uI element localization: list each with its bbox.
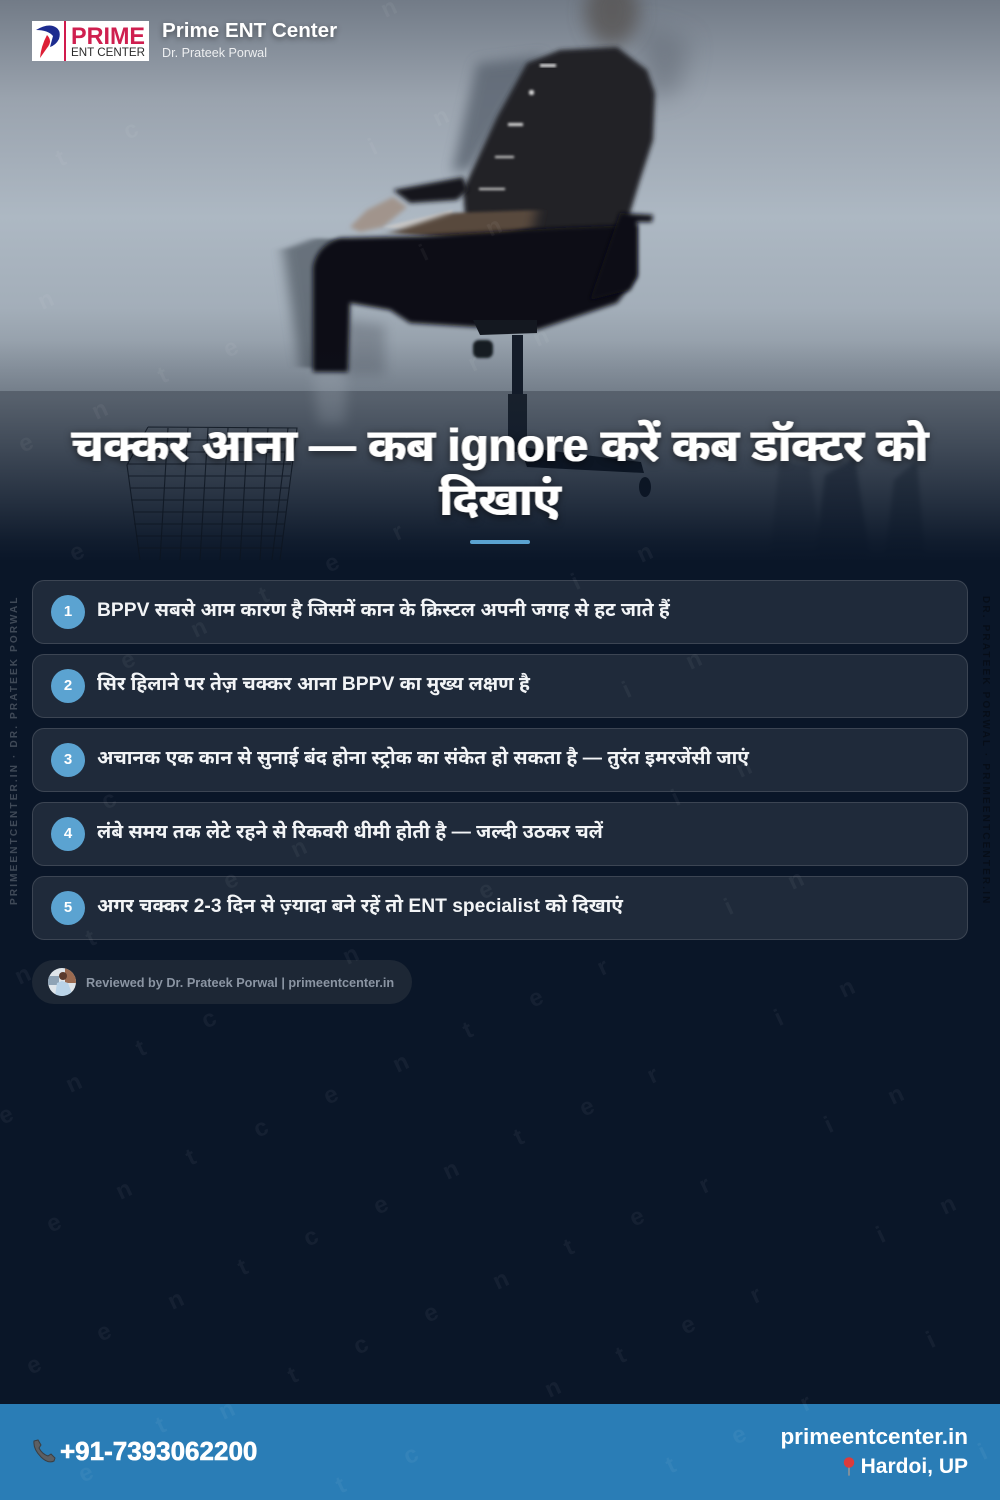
watermark letters overlay: n bbox=[540, 1373, 565, 1404]
tip 5 bbox=[32, 876, 968, 940]
watermark letters overlay: n bbox=[681, 645, 706, 676]
watermark letters overlay: t bbox=[181, 1143, 200, 1171]
brand name: Prime ENT Center bbox=[162, 19, 337, 42]
reviewer avatar bbox=[48, 968, 76, 996]
watermark letters overlay: t bbox=[254, 581, 273, 609]
watermark letters overlay: n bbox=[10, 960, 35, 991]
watermark letters overlay: n bbox=[783, 865, 808, 896]
watermark letters overlay: e bbox=[42, 1208, 66, 1238]
watermark letters overlay: n bbox=[528, 322, 553, 353]
tip 4 bbox=[32, 802, 968, 866]
list of five tips bbox=[32, 580, 968, 940]
tip 1 bbox=[32, 580, 968, 644]
watermark letters overlay: n bbox=[87, 395, 112, 426]
watermark letters overlay: i bbox=[364, 134, 382, 161]
watermark letters overlay: c bbox=[349, 1330, 373, 1360]
watermark letters overlay: r bbox=[388, 518, 408, 546]
icon: phone bbox=[33, 1439, 56, 1462]
title: दिखाएं bbox=[439, 473, 561, 525]
watermark letters overlay: r bbox=[796, 1389, 816, 1417]
watermark letters overlay: e bbox=[219, 865, 243, 895]
watermark letters overlay: n bbox=[632, 538, 657, 569]
location text: Hardoi, UP bbox=[861, 1455, 968, 1478]
watermark letters overlay: r bbox=[746, 1281, 766, 1309]
watermark letters overlay: i bbox=[415, 240, 433, 267]
watermark letters overlay: i bbox=[872, 1222, 890, 1249]
watermark letters overlay: n bbox=[834, 973, 859, 1004]
website: primeentcenter.in bbox=[780, 1424, 968, 1449]
watermark letters overlay: r bbox=[593, 953, 613, 981]
watermark letters overlay: e bbox=[474, 875, 498, 905]
icon: map pin bbox=[844, 1457, 854, 1476]
watermark letters overlay: i bbox=[770, 1005, 788, 1032]
tip 1: 1 bbox=[64, 603, 72, 620]
logo: ENT CENTER bbox=[71, 47, 145, 59]
watermark letters overlay: n bbox=[33, 285, 58, 316]
watermark letters overlay: t bbox=[131, 1034, 150, 1062]
watermark letters overlay: e bbox=[320, 548, 344, 578]
location bbox=[844, 1455, 968, 1478]
watermark letters overlay: e bbox=[74, 1458, 98, 1488]
watermark letters overlay: t bbox=[153, 361, 172, 389]
watermark letters overlay: t bbox=[233, 1253, 252, 1281]
watermark letters overlay: t bbox=[611, 1341, 630, 1369]
watermark letters overlay: e bbox=[22, 1350, 46, 1380]
watermark letters overlay: e bbox=[676, 1310, 700, 1340]
title underline bbox=[470, 540, 530, 544]
watermark letters overlay: t bbox=[509, 1123, 528, 1151]
watermark letters overlay: t bbox=[283, 1361, 302, 1389]
tip 2: सिर हिलाने पर तेज़ चक्कर आना BPPV का मुख्य लक्षण है bbox=[97, 674, 530, 695]
tip 2 bbox=[32, 654, 968, 718]
reviewer text: Reviewed by Dr. Prateek Porwal | primeentcenter.in bbox=[86, 976, 394, 990]
watermark letters overlay: t bbox=[458, 1016, 477, 1044]
watermark letters overlay: c bbox=[299, 1222, 323, 1252]
watermark letters overlay: n bbox=[481, 212, 506, 243]
watermark letters overlay: n bbox=[488, 1265, 513, 1296]
watermark letters overlay: i bbox=[820, 1112, 838, 1139]
tip 2: 2 bbox=[64, 677, 72, 694]
watermark letters overlay: c bbox=[119, 115, 143, 145]
watermark letters overlay: c bbox=[197, 1004, 221, 1034]
watermark letters overlay: t bbox=[51, 144, 70, 172]
watermark letters overlay: n bbox=[731, 753, 756, 784]
watermark letters overlay: e bbox=[219, 333, 243, 363]
watermark letters overlay: i bbox=[974, 1439, 992, 1466]
watermark letters overlay: e bbox=[116, 645, 140, 675]
right vertical watermark: DR. PRATEEK PORWAL · PRIMEENTCENTER.IN bbox=[980, 596, 991, 906]
watermark letters overlay: e bbox=[14, 428, 38, 458]
watermark letters overlay: e bbox=[524, 983, 548, 1013]
tip 1: BPPV सबसे आम कारण है जिसमें कान के क्रिस्टल अपनी जगह से हट जाते हैं bbox=[97, 600, 670, 621]
watermark letters overlay: t bbox=[151, 1411, 170, 1439]
watermark letters overlay: n bbox=[111, 1175, 136, 1206]
wire basket bbox=[127, 427, 297, 560]
watermark letters overlay: t bbox=[81, 924, 100, 952]
watermark letters overlay: c bbox=[249, 1113, 273, 1143]
tip 3 bbox=[32, 728, 968, 792]
watermark letters overlay: e bbox=[65, 537, 89, 567]
watermark letters overlay: n bbox=[286, 833, 311, 864]
watermark letters overlay: e bbox=[319, 1080, 343, 1110]
watermark letters overlay: e bbox=[92, 1317, 116, 1347]
tip 5: अगर चक्कर 2-3 दिन से ज़्यादा बने रहें तो ENT specialist को दिखाएं bbox=[97, 896, 623, 917]
doctor name: Dr. Prateek Porwal bbox=[162, 46, 267, 60]
watermark letters overlay: n bbox=[935, 1190, 960, 1221]
watermark letters overlay: n bbox=[186, 613, 211, 644]
watermark letters overlay: n bbox=[438, 1155, 463, 1186]
logo: PRIME bbox=[71, 23, 145, 50]
watermark letters overlay: n bbox=[61, 1068, 86, 1099]
watermark letters overlay: c bbox=[97, 785, 121, 815]
watermark letters overlay: t bbox=[331, 1471, 350, 1499]
tip 3: अचानक एक कान से सुनाई बंद होना स्ट्रोक का संकेत हो सकता है — तुरंत इमरजेंसी जाएं bbox=[97, 748, 749, 769]
watermark letters overlay: t bbox=[559, 1233, 578, 1261]
left vertical watermark: PRIMEENTCENTER.IN · DR. PRATEEK PORWAL bbox=[9, 595, 20, 905]
tip 4: लंबे समय तक लेटे रहने से रिकवरी धीमी होती है — जल्दी उठकर चलें bbox=[97, 822, 603, 843]
watermark letters overlay: e bbox=[575, 1092, 599, 1122]
watermark letters overlay: i bbox=[618, 677, 636, 704]
watermark letters overlay: n bbox=[883, 1080, 908, 1111]
watermark letters overlay: i bbox=[720, 894, 738, 921]
watermark letters overlay: e bbox=[369, 1190, 393, 1220]
watermark letters overlay: e bbox=[727, 1420, 751, 1450]
title: चक्कर आना — कब ignore करें कब डॉक्टर को bbox=[72, 419, 928, 471]
watermark letters overlay: t bbox=[661, 1451, 680, 1479]
watermark letters overlay: i bbox=[922, 1327, 940, 1354]
tip 5: 5 bbox=[64, 899, 72, 916]
watermark letters overlay: i bbox=[667, 785, 685, 812]
phone number: +91-7393062200 bbox=[60, 1436, 257, 1466]
watermark letters overlay: c bbox=[399, 1440, 423, 1470]
watermark letters overlay: n bbox=[428, 102, 453, 133]
watermark letters overlay: e bbox=[419, 1298, 443, 1328]
footer bar bbox=[0, 1404, 1000, 1500]
tip 4: 4 bbox=[64, 825, 72, 842]
watermark letters overlay: n bbox=[338, 940, 363, 971]
watermark letters overlay: r bbox=[464, 349, 484, 377]
reviewer pill bbox=[32, 960, 412, 1004]
logo bbox=[32, 21, 149, 61]
watermark letters overlay: n bbox=[388, 1048, 413, 1079]
watermark letters overlay: r bbox=[695, 1171, 715, 1199]
tip 3: 3 bbox=[64, 751, 72, 768]
watermark letters overlay: r bbox=[643, 1061, 663, 1089]
watermark letters overlay: i bbox=[567, 569, 585, 596]
watermark letters overlay: n bbox=[163, 1285, 188, 1316]
watermark letters overlay: e bbox=[625, 1202, 649, 1232]
title bbox=[69, 418, 932, 525]
watermark letters overlay: n bbox=[214, 1395, 239, 1426]
